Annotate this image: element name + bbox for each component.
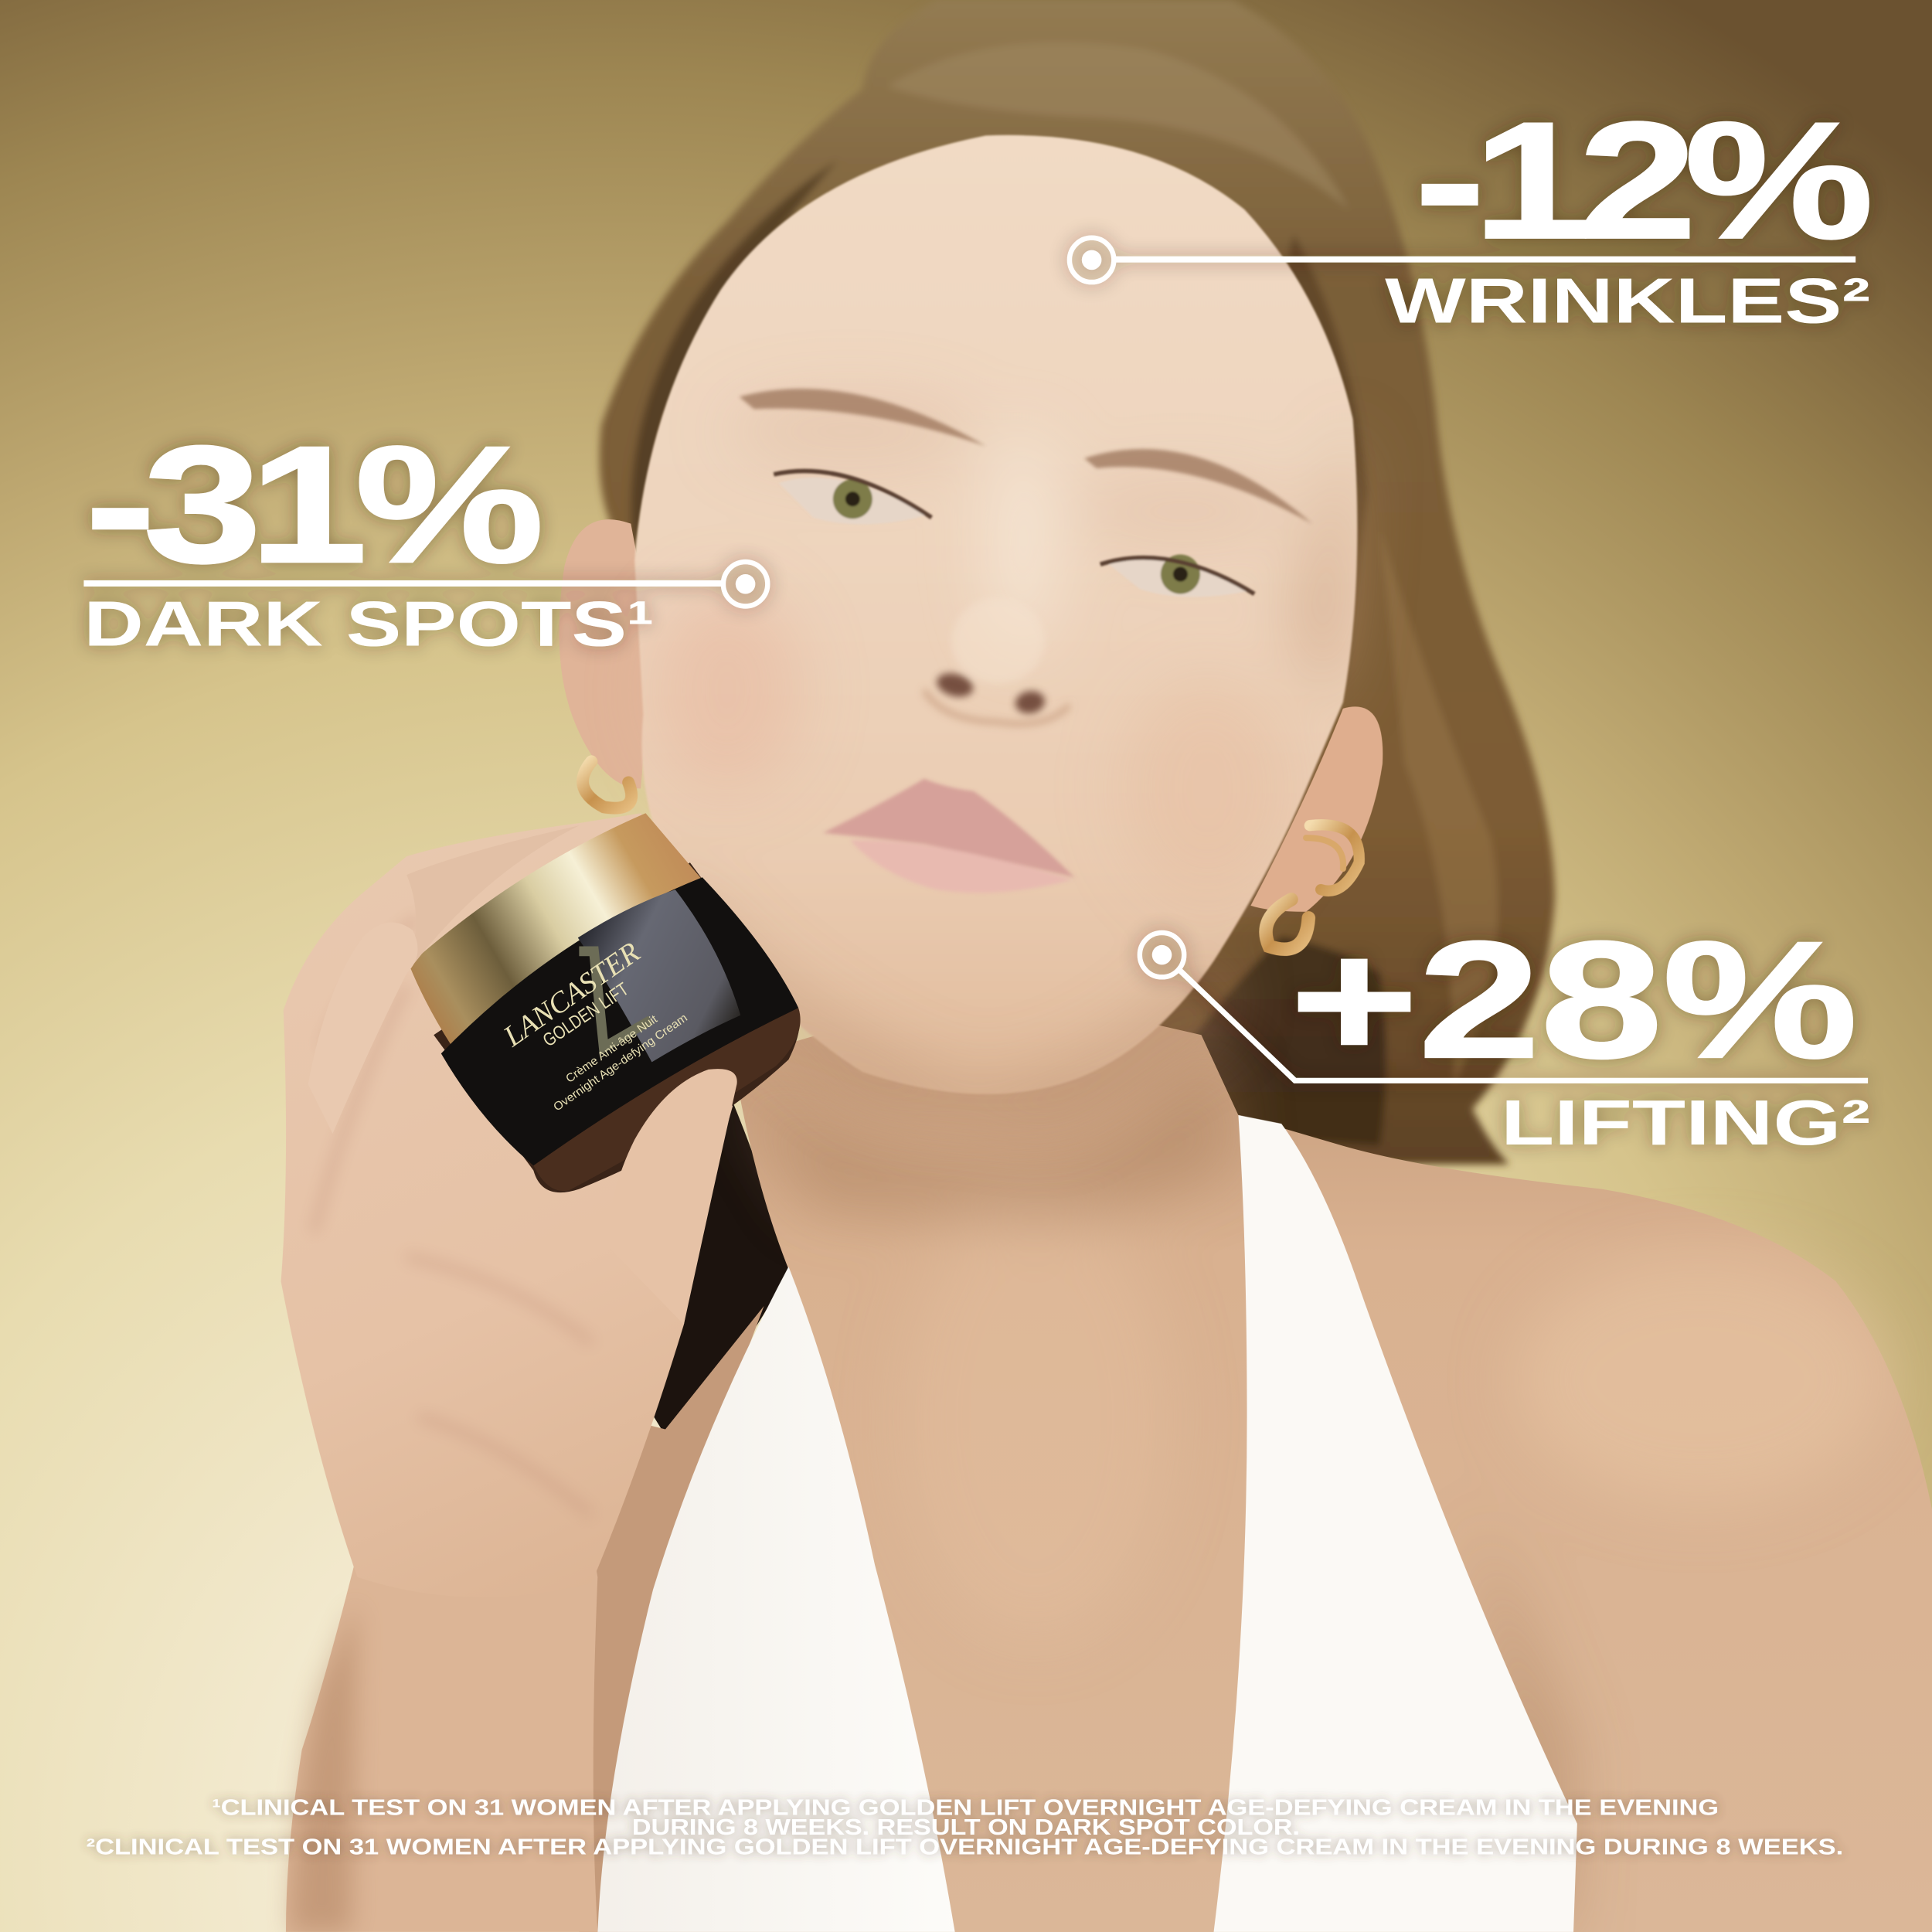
left lapel bbox=[597, 1267, 955, 1932]
fingers bbox=[308, 923, 417, 1134]
footnote 2: ²CLINICAL TEST ON 31 WOMEN AFTER APPLYING GOLDEN LIFT OVERNIGHT AGE-DEFYING CREAM IN THE EVENING DURING 8 WEEKS. bbox=[87, 1835, 1843, 1860]
jar label text bbox=[498, 936, 690, 1114]
dark spots marker bbox=[723, 562, 767, 606]
lifting leader line bbox=[1180, 971, 1868, 1080]
callout: lifting bbox=[1140, 907, 1870, 1158]
right eyebrow bbox=[1084, 449, 1312, 524]
jar reflection bbox=[578, 889, 740, 1062]
right ear bbox=[1250, 706, 1383, 912]
white halter top bbox=[597, 1115, 1577, 1932]
dark spots leader line bbox=[83, 580, 722, 587]
earring right upper bbox=[1310, 825, 1359, 891]
left eyebrow bbox=[740, 389, 986, 446]
dark spots label: DARK SPOTS¹ bbox=[83, 587, 655, 659]
shoulder and chest shading bbox=[740, 1047, 1885, 1932]
jar L monogram bbox=[579, 951, 651, 1047]
fingertip on top of jar bbox=[406, 825, 579, 974]
wrinkles marker bbox=[1070, 238, 1114, 282]
wrinkles value: -12% bbox=[1414, 88, 1869, 274]
jar rim bbox=[533, 1008, 801, 1191]
hair bbox=[600, 0, 1555, 1165]
jar English name: Overnight Age-defying Cream bbox=[551, 1012, 690, 1114]
dark hair behind neck bbox=[616, 1060, 788, 1435]
lifting value: +28% bbox=[1290, 907, 1858, 1093]
lifting label: LIFTING² bbox=[1501, 1087, 1870, 1158]
earring right lower bbox=[1266, 900, 1308, 949]
skin behind arm, left of top bbox=[579, 1306, 764, 1932]
left arm and hand bbox=[281, 813, 764, 1932]
dark spots value: -31% bbox=[85, 412, 539, 597]
wrinkles leader line bbox=[1115, 257, 1855, 263]
right lapel bbox=[1213, 1115, 1577, 1932]
jar body bbox=[441, 877, 798, 1165]
callout: wrinkles bbox=[1070, 88, 1870, 337]
right eye bbox=[1100, 554, 1254, 597]
product jar bbox=[409, 813, 801, 1192]
earring left bbox=[583, 761, 631, 808]
nose bbox=[924, 597, 1070, 724]
thumb over jar bbox=[606, 1069, 737, 1325]
face bbox=[634, 135, 1357, 1094]
GOLDEN LIFT: GOLDEN LIFT bbox=[539, 978, 633, 1051]
footnote 1 line 1: ¹CLINICAL TEST ON 31 WOMEN AFTER APPLYING GOLDEN LIFT OVERNIGHT AGE-DEFYING CREAM IN THE EVENING bbox=[212, 1796, 1719, 1821]
wrinkles label: WRINKLES² bbox=[1385, 265, 1870, 337]
jar lid bbox=[409, 813, 702, 1045]
callout: dark spots bbox=[83, 412, 767, 659]
jar French name: Crème Anti-âge Nuit bbox=[563, 1012, 661, 1086]
left ear bbox=[559, 519, 653, 788]
left eye bbox=[774, 471, 931, 524]
finger creases bbox=[315, 918, 591, 1515]
LANCASTER: LANCASTER bbox=[498, 936, 646, 1053]
footnote 1 line 2: DURING 8 WEEKS. RESULT ON DARK SPOT COLOR. bbox=[632, 1815, 1300, 1840]
neck and torso skin bbox=[591, 986, 1932, 1932]
facial shading bbox=[653, 396, 1353, 1134]
footnotes bbox=[87, 1796, 1843, 1860]
lifting marker bbox=[1140, 933, 1184, 977]
lips bbox=[823, 779, 1074, 893]
earring right upper inner band bbox=[1306, 838, 1343, 869]
earrings bbox=[583, 761, 1359, 949]
jar base bbox=[434, 862, 800, 1192]
